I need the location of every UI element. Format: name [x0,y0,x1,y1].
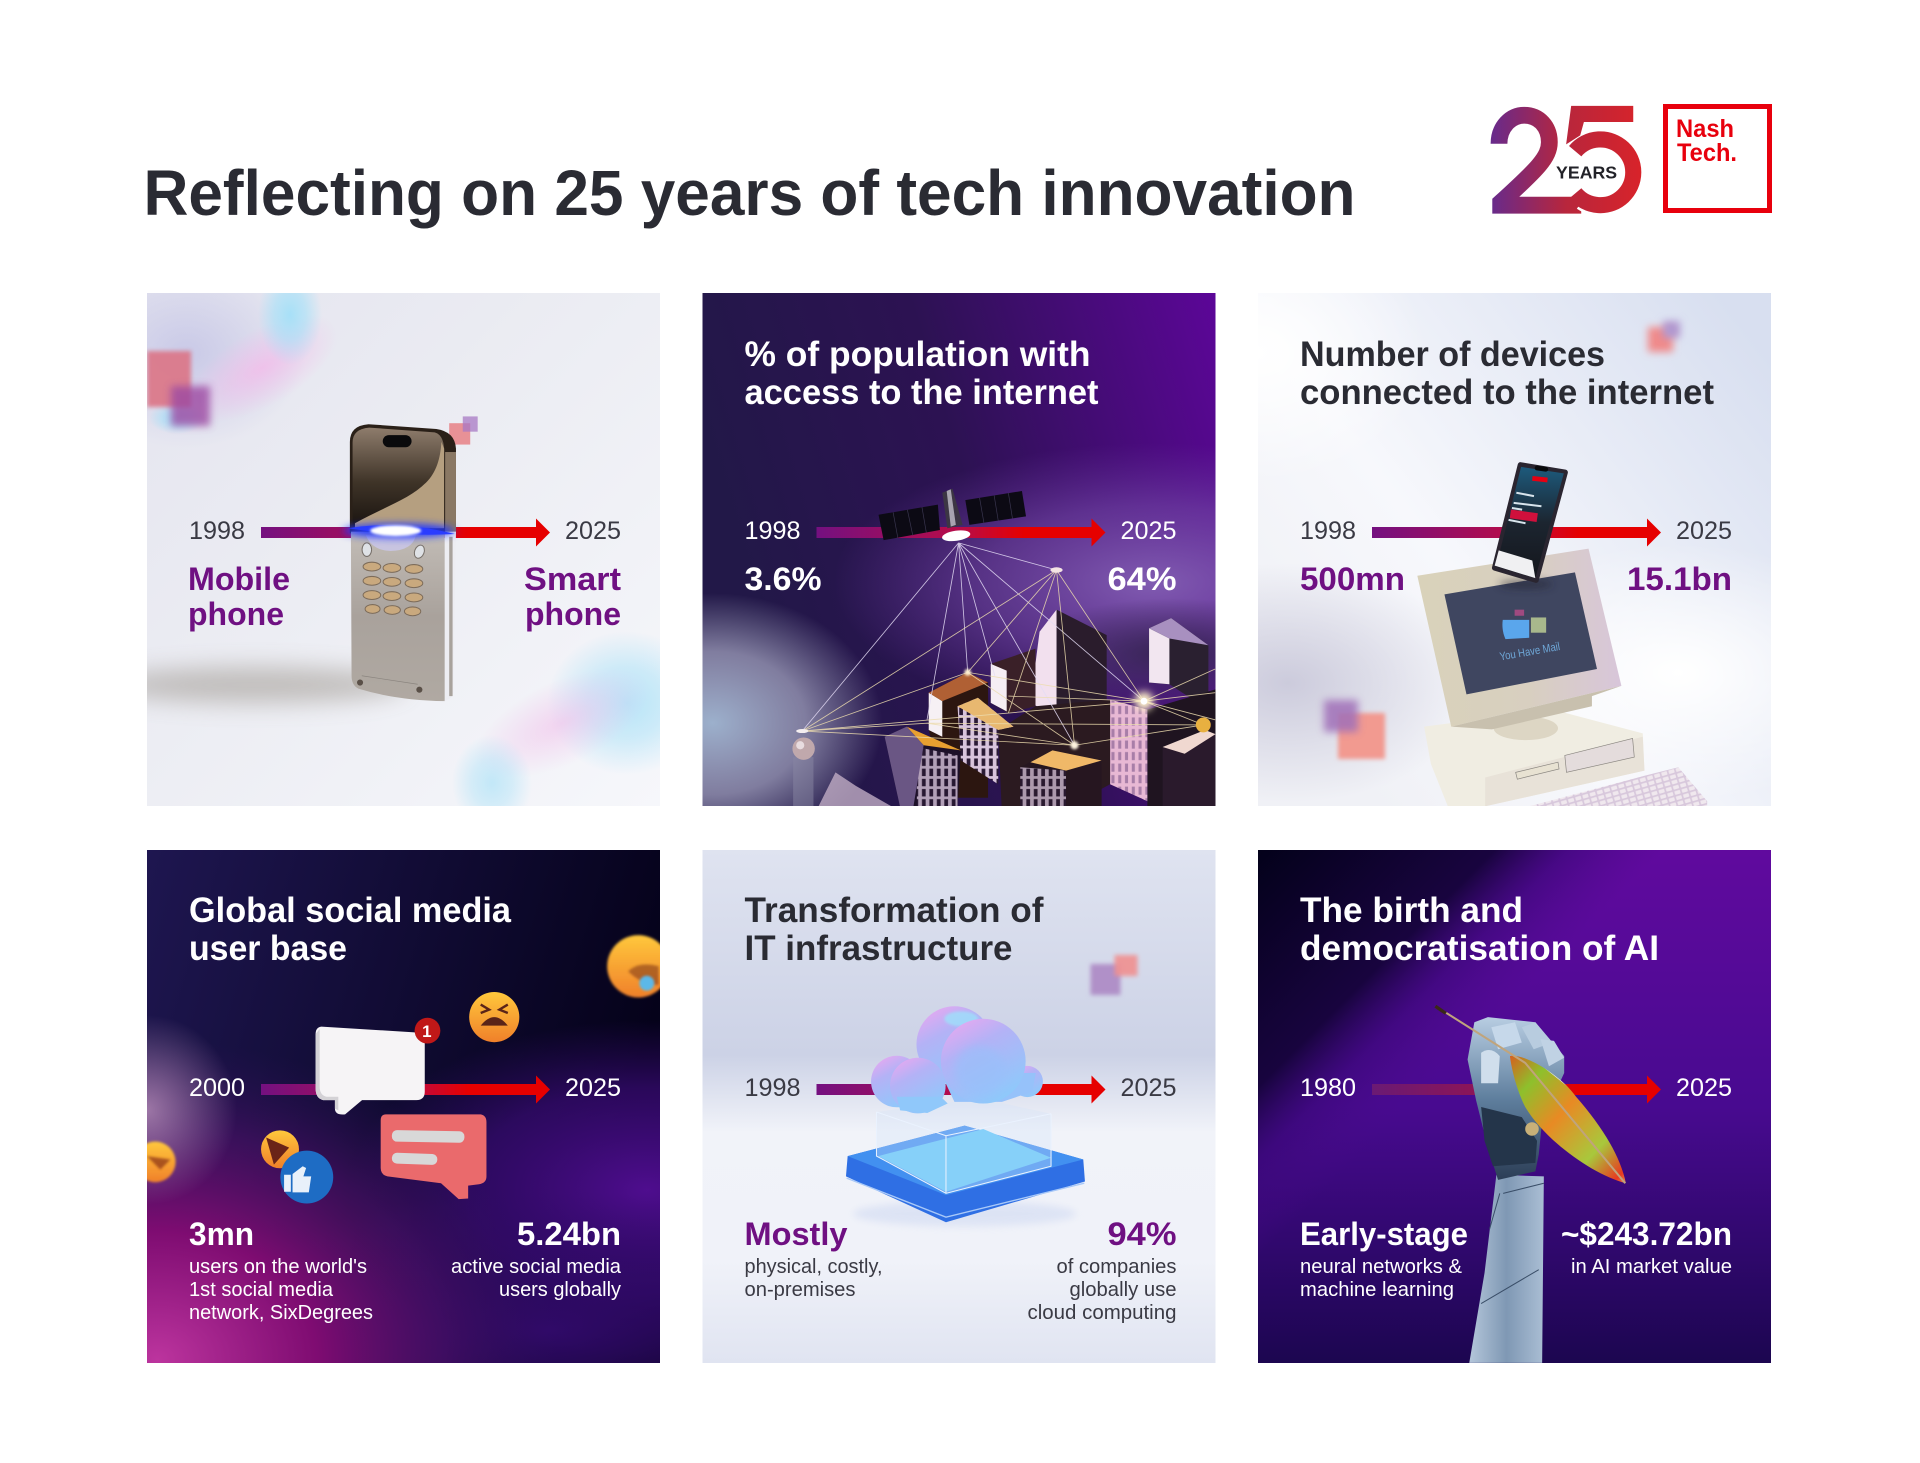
start label: Mobile [188,561,290,597]
icon: smartphone [1495,465,1565,580]
end value: 5.24bn [517,1216,621,1252]
start description: on-premises [744,1279,856,1301]
end year: 2025 [1120,1074,1176,1102]
start description [744,1256,882,1301]
end value: 15.1bn [1627,561,1732,597]
end description: cloud computing [1028,1302,1176,1324]
heading: user base [189,929,347,968]
illustration: connected city [792,543,1216,806]
logo: 25 years [1499,106,1648,218]
start year: 1998 [189,517,245,545]
timeline arrow [1372,1076,1661,1104]
end value: ~$243.72bn [1561,1216,1732,1252]
start label [188,561,290,632]
panel: internet access [702,293,1216,806]
heading [1300,335,1714,412]
panel: AI [1258,850,1771,1363]
end description [451,1256,622,1301]
start year: 2000 [189,1074,245,1102]
end year: 2025 [565,1074,621,1102]
panel 5 background [702,850,1216,1363]
logo: NashTech: Tech. [1677,139,1737,167]
heading [1300,891,1659,968]
illustration: retro computer: You Have Mail [1499,641,1561,663]
heading: democratisation of AI [1300,929,1659,968]
end label [524,561,621,632]
logo: 25 years: YEARS [1556,162,1617,182]
end value: 94% [1108,1216,1176,1252]
panel 6 background [1258,850,1771,1363]
panel 1 background [147,293,660,806]
start value: 3mn [189,1216,254,1252]
panel: IT infrastructure [702,850,1216,1363]
heading: IT infrastructure [744,929,1012,968]
start description: machine learning [1300,1279,1454,1301]
start description [189,1256,373,1324]
illustration: social icons: 1 [422,1022,432,1041]
heading [189,891,512,968]
panel 2 background [702,293,1216,806]
timeline arrow [1372,518,1661,546]
end description: users globally [499,1279,621,1301]
start description [1300,1256,1463,1301]
start value: 500mn [1300,561,1405,597]
icon: satellite [879,489,1026,543]
panel: social media [147,850,660,1363]
end description: globally use [1070,1279,1176,1301]
panel 3 background [1258,293,1771,806]
start year: 1998 [744,1074,800,1102]
start year: 1998 [744,517,800,545]
panel 4 background [147,850,660,1363]
end year: 2025 [1676,1074,1732,1102]
end description: of companies [1056,1256,1176,1278]
heading: % of population with [744,335,1090,374]
panel: mobile phone to smartphone [147,293,660,806]
heading: access to the internet [744,373,1099,412]
end label: Smart [524,561,621,597]
timeline arrow [816,518,1106,546]
heading: connected to the internet [1300,373,1714,412]
end year: 2025 [1676,517,1732,545]
illustration: retro computer [1417,549,1707,806]
start description: 1st social media [189,1279,334,1301]
logo: NashTech [1666,106,1770,210]
end year: 2025 [1120,517,1176,545]
timeline arrow [261,518,550,546]
heading: Number of devices [1300,335,1605,374]
illustration: social icons [135,935,670,1204]
start year: 1980 [1300,1074,1356,1102]
timeline arrow [261,1076,550,1104]
end value: 64% [1108,561,1176,597]
heading [744,335,1099,412]
start description: neural networks & [1300,1256,1463,1278]
heading: Transformation of [744,891,1044,930]
timeline arrow [816,1076,1106,1104]
start label: phone [188,596,284,632]
heading [744,891,1044,968]
end label: phone [525,596,621,632]
heading: The birth and [1300,891,1523,930]
start description: network, SixDegrees [189,1302,373,1324]
end description: active social media [451,1256,622,1278]
illustration: robotic arm with feather [1435,1006,1634,1363]
heading: Global social media [189,891,512,930]
end description: in AI market value [1571,1256,1732,1278]
end description [1028,1256,1176,1324]
end year: 2025 [565,517,621,545]
illustration: cloud over platform [846,1006,1085,1227]
start year: 1998 [1300,517,1356,545]
start value: 3.6% [744,561,822,597]
panel: connected devices [1258,293,1771,806]
illustration: hybrid phone [343,416,478,701]
title: Reflecting on 25 years of tech innovation [144,157,1356,229]
start description: physical, costly, [744,1256,882,1278]
logo: NashTech: Nash [1676,115,1734,143]
start description: users on the world's [189,1256,367,1278]
start value: Mostly [744,1216,848,1252]
start value: Early-stage [1300,1216,1468,1252]
